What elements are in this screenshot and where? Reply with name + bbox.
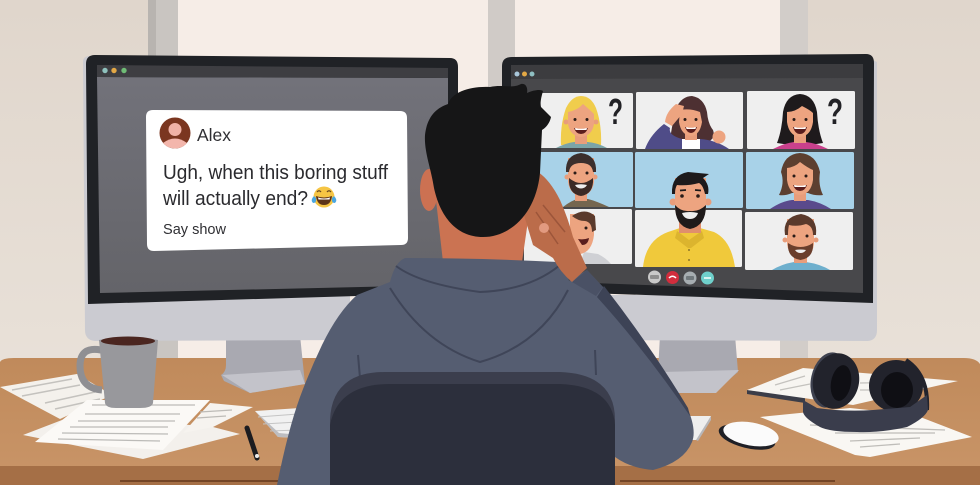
video grid xyxy=(524,91,855,270)
paper under headphones xyxy=(760,408,972,457)
left ear xyxy=(420,169,438,211)
question mark: ? xyxy=(608,91,623,132)
call control buttons xyxy=(648,270,714,284)
hoodie body and arm xyxy=(277,258,694,485)
title bar right xyxy=(511,64,863,79)
paper sheet bottom xyxy=(23,415,240,459)
window controls left xyxy=(102,68,127,73)
pen xyxy=(247,428,259,458)
monitor stand left xyxy=(221,335,305,393)
office chair back xyxy=(330,372,615,485)
paper sheet right xyxy=(183,403,253,433)
papers on right of desk xyxy=(747,368,972,457)
icon: laughing emoji xyxy=(312,186,336,208)
tile: woman with brown hair xyxy=(746,152,854,209)
action label: Say show xyxy=(163,221,226,238)
sender name: Alex xyxy=(197,125,231,145)
monitor stand right xyxy=(658,335,738,392)
screen right xyxy=(511,64,863,293)
avatar xyxy=(160,118,190,148)
hair xyxy=(425,84,551,237)
screen left xyxy=(97,77,448,293)
tile: bearded man in yellow shirt, main speaker xyxy=(635,152,743,267)
tile: woman with hand on forehead xyxy=(636,92,743,149)
headband xyxy=(803,395,928,432)
bezel right xyxy=(502,54,874,303)
message line 1: Ugh, when this boring stuff xyxy=(163,162,388,184)
sleeve cuff xyxy=(572,270,603,296)
keyboard xyxy=(255,408,300,438)
hand on cheek xyxy=(524,172,587,282)
question mark: ? xyxy=(827,91,843,132)
right monitor xyxy=(502,54,877,393)
window controls right xyxy=(514,72,534,76)
desk xyxy=(0,358,980,485)
tile: man with brown beard xyxy=(745,212,853,270)
coffee mug xyxy=(80,336,158,408)
papers on left of desk xyxy=(0,374,253,459)
bezel left xyxy=(86,55,458,304)
message line 2: will actually end? xyxy=(162,188,308,210)
computer mouse xyxy=(716,418,781,455)
paper sheet back left xyxy=(0,374,112,419)
tile: bearded man xyxy=(530,152,633,207)
hoodie hood lines xyxy=(358,265,596,378)
keyboard right end xyxy=(690,416,711,441)
left ear cup xyxy=(806,349,864,413)
monitor chin left xyxy=(83,56,350,341)
left monitor xyxy=(83,55,458,393)
notepad xyxy=(747,390,805,403)
chat notification card xyxy=(146,110,408,251)
man seen from behind xyxy=(277,84,694,485)
monitor chin right xyxy=(570,295,877,341)
tile: woman with black hair xyxy=(747,91,855,149)
headphones xyxy=(803,349,928,432)
tile: blonde woman xyxy=(530,91,633,148)
title bar left xyxy=(97,65,448,78)
neck xyxy=(436,200,531,262)
paper sheet top xyxy=(35,400,210,450)
sleeve shadow xyxy=(597,286,690,416)
tile: partly hidden man xyxy=(524,209,632,264)
right ear cup xyxy=(869,360,927,412)
